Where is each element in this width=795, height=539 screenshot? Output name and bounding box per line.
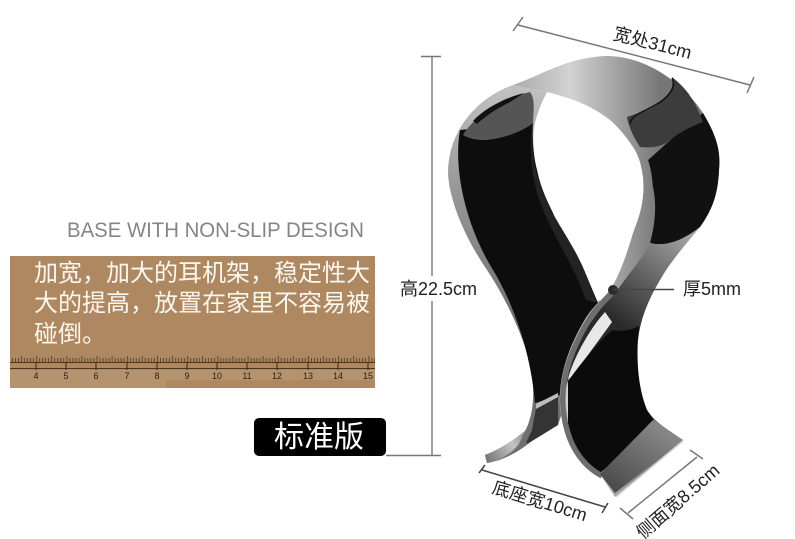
ruler: 11 <box>242 371 252 381</box>
description text: 加宽，加大的耳机架，稳定性大 <box>34 260 370 287</box>
ruler: 14 <box>333 371 343 381</box>
front band silhouette <box>513 56 719 497</box>
dimension: base width 10cm: 底座宽10cm <box>490 477 590 525</box>
back band black face <box>458 122 598 403</box>
foot plate <box>600 420 683 493</box>
upper left reflection <box>463 92 534 140</box>
ruler <box>10 356 375 381</box>
lower right band <box>564 227 700 395</box>
front leg rim <box>563 293 612 476</box>
leg crossing highlight <box>536 393 558 409</box>
description text <box>34 260 370 348</box>
right black face <box>648 113 719 245</box>
inner dark strip <box>531 125 597 303</box>
foot front edge <box>616 441 683 497</box>
headphone stand <box>448 56 719 497</box>
dimension: height 22.5cm: 高22.5cm <box>400 279 477 299</box>
ruler: 10 <box>212 371 222 381</box>
ruler: 7 <box>124 371 130 381</box>
back band silhouette <box>448 85 600 463</box>
reflection outline <box>630 78 673 124</box>
white highlight <box>568 312 612 379</box>
heading: base with non-slip design: BASE WITH NON-SLIP DESIGN <box>67 219 364 242</box>
back foot top highlight <box>485 431 525 463</box>
right lower black face <box>568 326 654 473</box>
badge: standard edition: 标准版 <box>274 421 364 454</box>
panel: tan description with ruler <box>10 256 375 388</box>
badge: standard edition <box>254 418 386 456</box>
upper left dark streak <box>473 93 524 124</box>
back foot dark side <box>527 396 558 443</box>
dimension: width 31cm: 宽处31cm <box>611 23 694 63</box>
description text: 大的提高，放置在家里不容易被 <box>34 290 370 317</box>
ruler: 5 <box>63 371 69 381</box>
dimension: thickness 5mm: 厚5mm <box>683 279 741 299</box>
description text: 碰倒。 <box>34 321 106 348</box>
ruler: 12 <box>272 371 282 381</box>
ruler: 13 <box>303 371 313 381</box>
dimension: width 31cm <box>513 17 754 93</box>
dimension: thickness 5mm <box>608 279 741 299</box>
dimension: height 22.5cm <box>386 56 478 456</box>
ruler: 8 <box>154 371 160 381</box>
right glossy reflection <box>627 77 703 147</box>
ruler: 9 <box>184 371 190 381</box>
ruler: 6 <box>93 371 99 381</box>
ruler: 15 <box>363 371 373 381</box>
dimension: base width 10cm <box>479 465 608 525</box>
ruler: 4 <box>33 371 39 381</box>
